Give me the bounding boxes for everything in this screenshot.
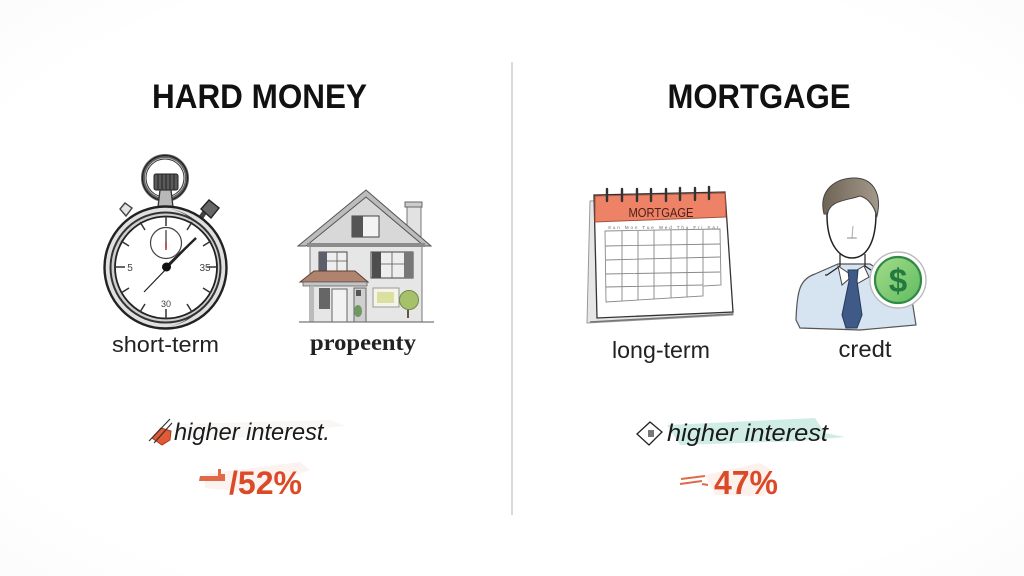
- icon: stopwatch: 5: [127, 263, 133, 274]
- label: long-term: long-term: [612, 337, 710, 363]
- calendar header text: MORTGAGE: [628, 205, 694, 220]
- right higher interest row: [637, 418, 845, 447]
- left higher interest row: [149, 419, 345, 446]
- value: 47%: 47%: [714, 464, 778, 501]
- title: hard money: HARD MONEY: [152, 78, 367, 116]
- icon: diamond tag: [637, 422, 662, 445]
- value: 52%: /52%: [229, 465, 302, 501]
- dollar coin: [870, 252, 926, 308]
- center divider: [511, 62, 513, 515]
- right percentage: [680, 463, 778, 501]
- icon: stopwatch: [104, 156, 226, 328]
- text: higher interest: higher interest.: [174, 419, 330, 446]
- porch roof: [300, 271, 368, 282]
- icon: house: [298, 190, 434, 322]
- dollar coin: $: [889, 262, 907, 299]
- icon: red arrow dash: [199, 469, 225, 481]
- icon: person with dollar coin: [796, 178, 926, 330]
- calendar weekday labels: Sun Mon Tue Wed Thu Fri Sat: [608, 225, 719, 230]
- upper windows: [319, 252, 413, 278]
- label: credt: credt: [838, 336, 892, 362]
- spiral rings: [607, 187, 709, 201]
- text: higher interest: higher interest: [667, 420, 829, 447]
- tree: [400, 290, 418, 318]
- icon: red arrow lines: [680, 476, 708, 485]
- left percentage: [199, 462, 310, 501]
- label: propeenty: propeenty: [310, 330, 417, 355]
- icon: calendar: [587, 187, 733, 323]
- calendar grid: [605, 229, 721, 302]
- title: mortgage: MORTGAGE: [668, 78, 850, 116]
- door and porch: [310, 286, 366, 322]
- label: short-term: short-term: [112, 332, 219, 357]
- lower window: [373, 288, 399, 307]
- attic window: [352, 216, 379, 237]
- icon: red tag: [149, 419, 172, 445]
- icon: stopwatch: 30: [161, 299, 171, 309]
- icon: stopwatch: 35: [199, 263, 211, 274]
